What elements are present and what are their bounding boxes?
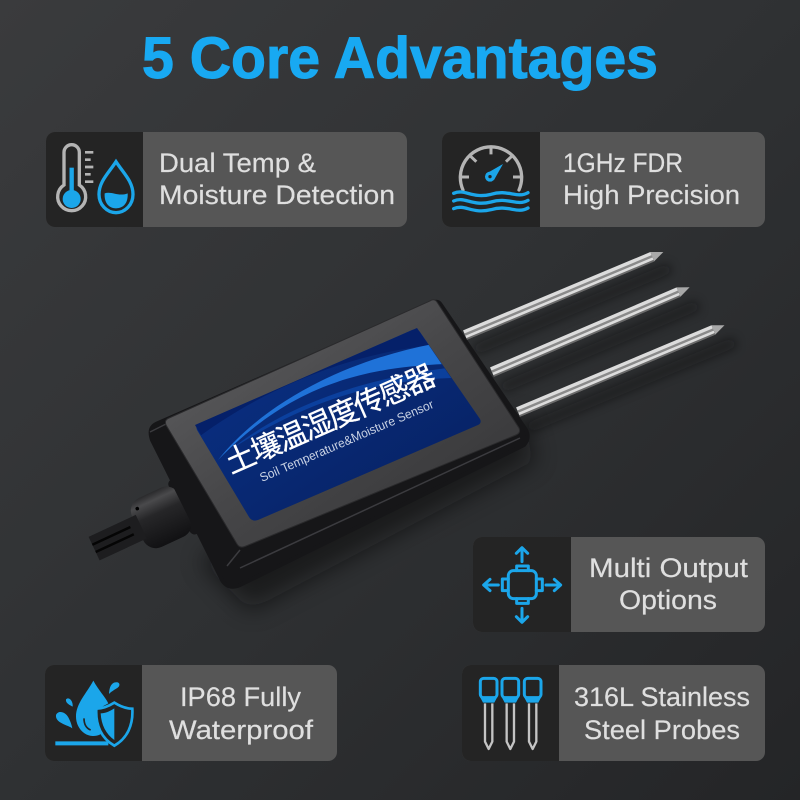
glossy corner highlight <box>150 424 520 568</box>
label: dual temp and moisture detection: Moisture Detection <box>159 180 395 210</box>
sensor body shadow <box>200 415 535 610</box>
body outer shell <box>151 302 528 587</box>
title: 5 Core Advantages <box>142 26 658 91</box>
probe 3 <box>516 321 727 417</box>
label: multi output options <box>589 553 749 615</box>
icon: three probes <box>480 678 541 749</box>
label: 316L stainless steel probes <box>574 682 750 745</box>
label: IP68 fully waterproof: IP68 Fully <box>180 682 301 712</box>
label: dual temp and moisture detection: Dual Temp & <box>159 148 316 178</box>
bezel <box>165 300 520 547</box>
sensor device <box>81 247 727 587</box>
label: 1GHz FDR high precision: High Precision <box>563 180 740 210</box>
panel: 1GHz FDR <box>442 132 765 227</box>
icon: module with four arrows <box>484 548 561 622</box>
label: 316L stainless steel probes: Steel Probes <box>584 715 740 745</box>
label: multi output options: Multi Output <box>589 553 749 583</box>
probe 2 <box>490 283 692 377</box>
label: multi output options: Options <box>619 585 717 615</box>
label: IP68 fully waterproof: Waterproof <box>169 715 314 745</box>
label: 1GHz FDR high precision: 1GHz FDR <box>563 148 683 178</box>
icon: thermometer and water drop <box>58 145 133 213</box>
icon: gauge over waves <box>454 146 528 211</box>
label: 316L stainless steel probes: 316L Stainless <box>574 682 750 712</box>
label: 1GHz FDR high precision <box>563 148 740 210</box>
blue label screen <box>190 325 481 521</box>
label: Chinese product name: 土壤温湿度传感器 <box>221 359 441 480</box>
label: dual temp and moisture detection <box>159 148 395 210</box>
icon: water drop with shield <box>55 681 132 746</box>
panel: 316L stainless steel probes <box>462 665 765 761</box>
panel: dual temp and moisture <box>46 132 407 227</box>
probe shadows <box>475 268 735 428</box>
label: IP68 fully waterproof <box>169 682 314 745</box>
probe 1 <box>463 247 665 340</box>
panel: multi output options <box>473 537 765 632</box>
connector <box>81 473 210 576</box>
panel: IP68 waterproof <box>45 665 337 761</box>
label: English product name: Soil Temperature&Moisture Sensor <box>258 397 436 485</box>
